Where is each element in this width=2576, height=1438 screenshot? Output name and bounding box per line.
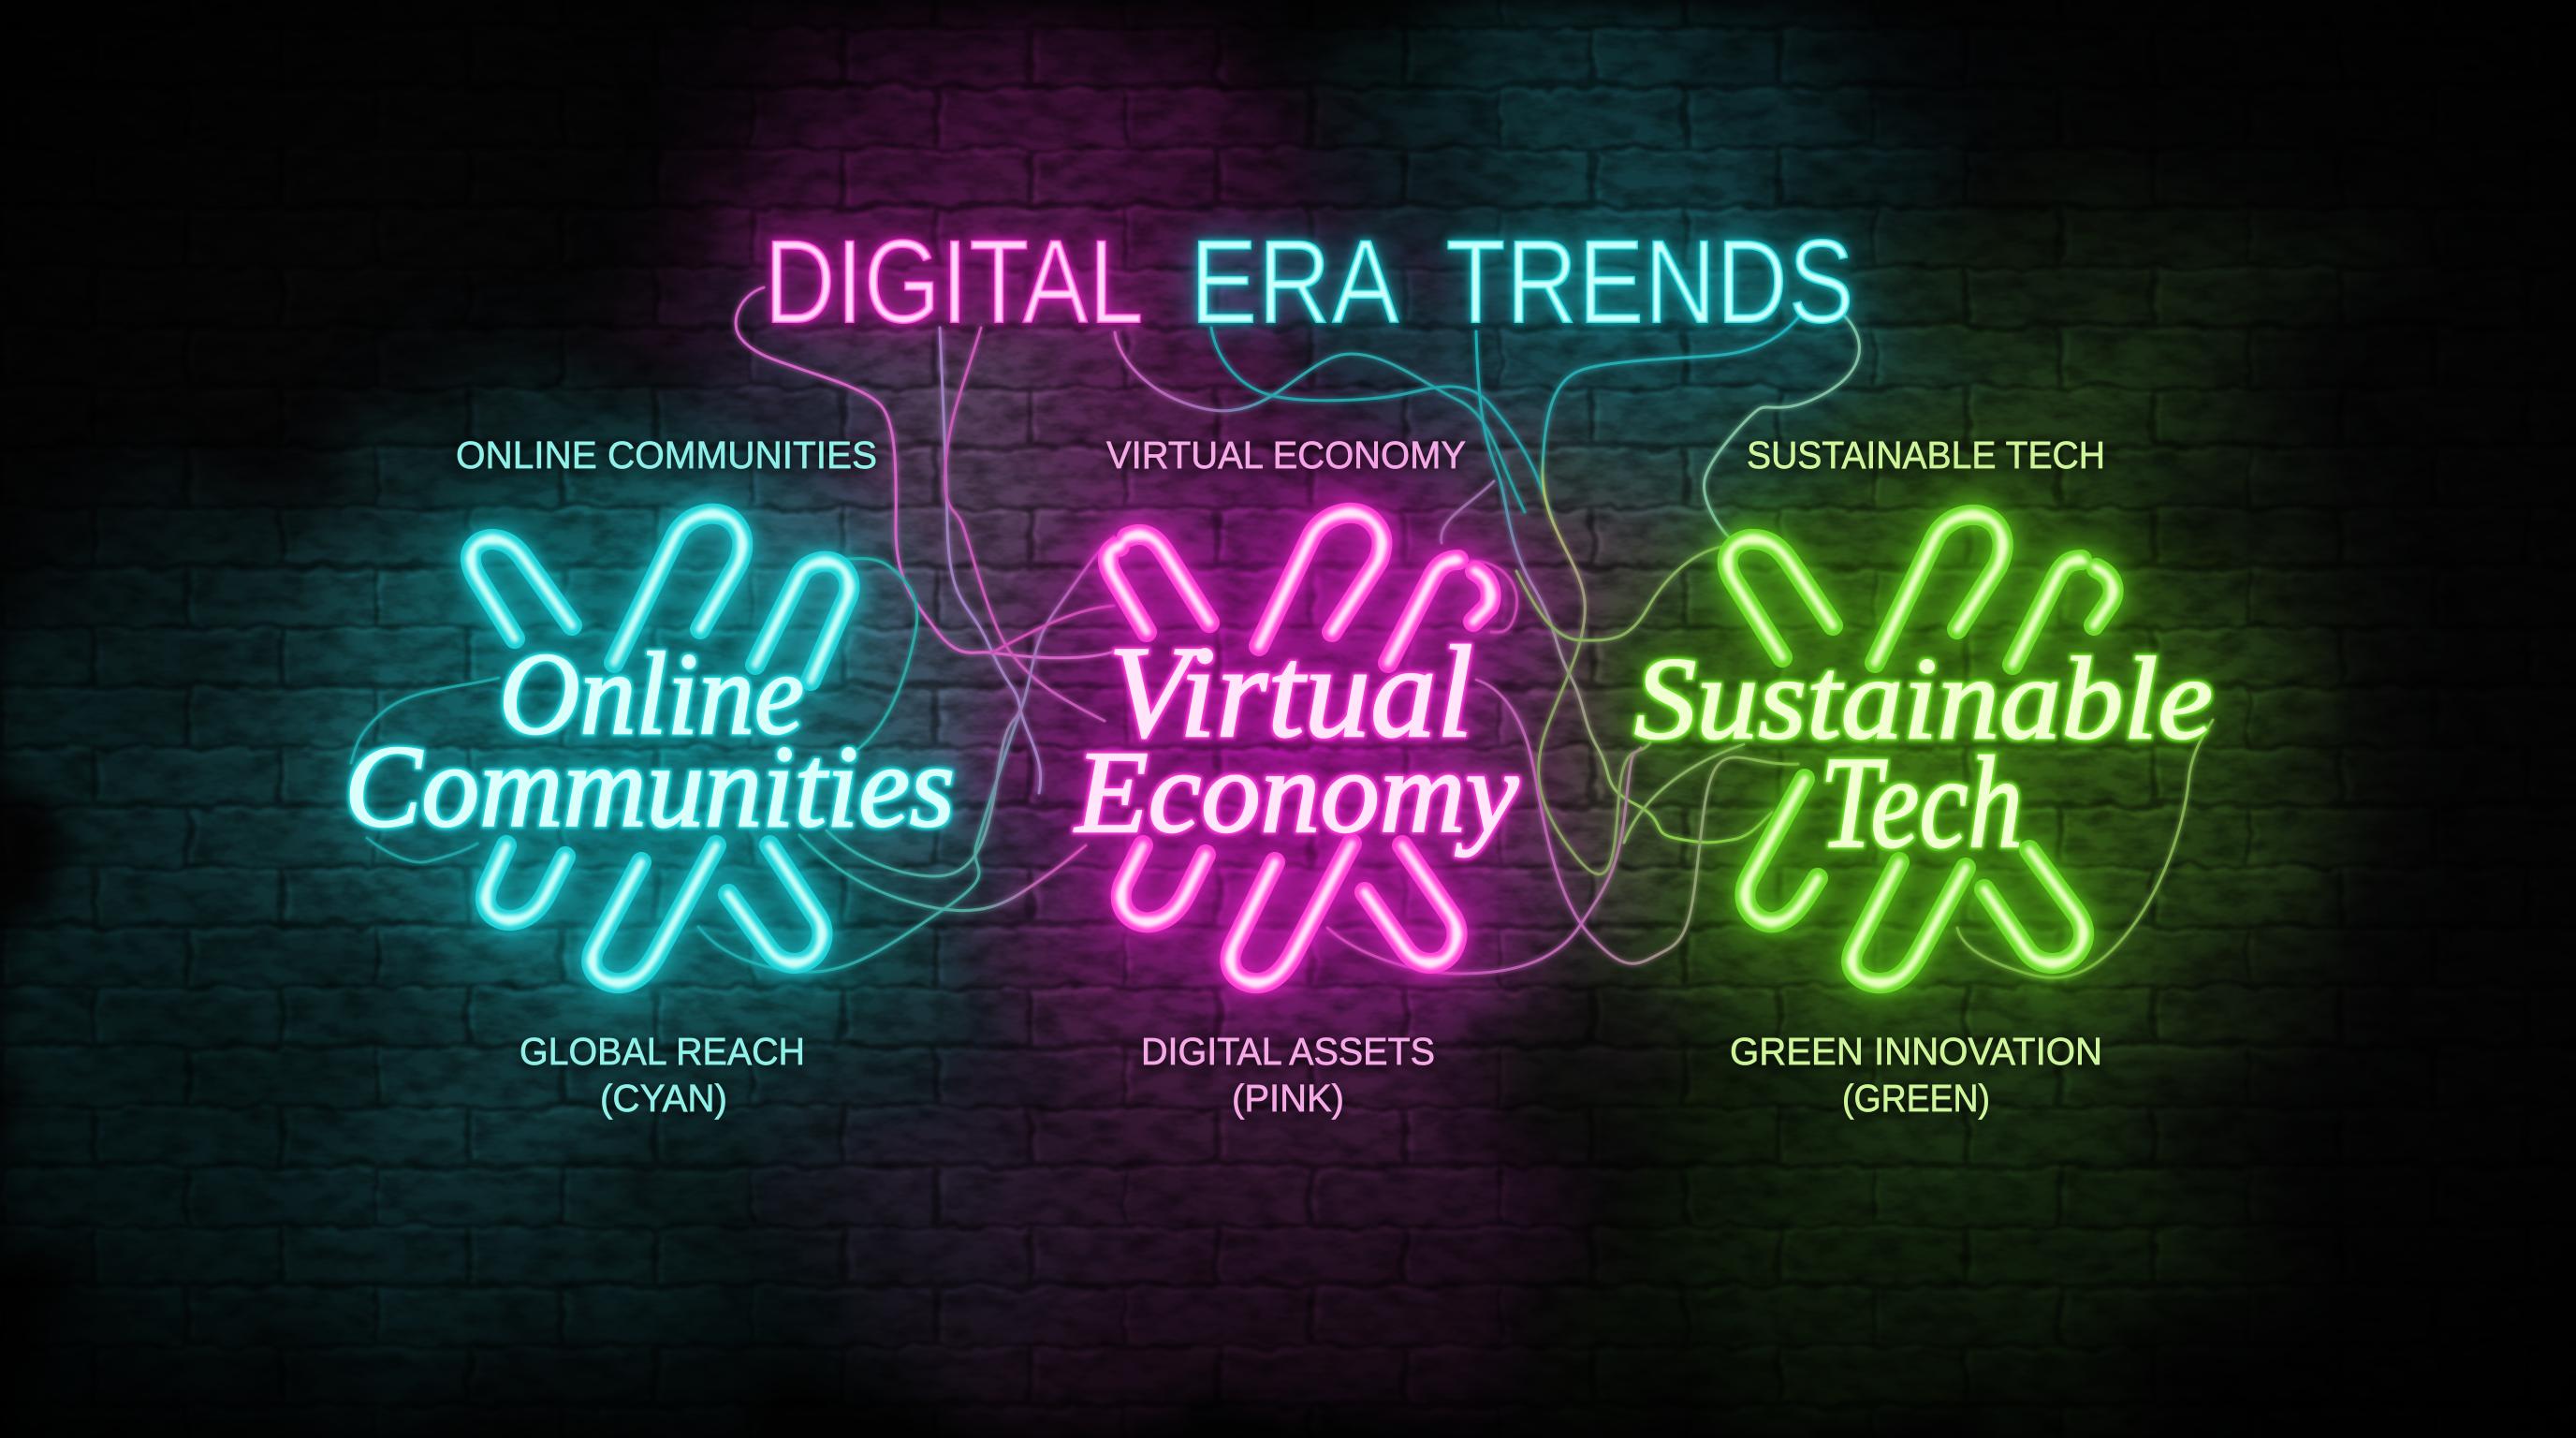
wire: virtual tube link (992, 606, 1114, 653)
wire: title S left (1539, 315, 1800, 874)
halo: green sign (1549, 393, 2298, 1105)
neon script heading (1074, 620, 1519, 858)
neon burst tubes (471, 514, 850, 983)
title (764, 215, 1854, 349)
wire: virtual bottom loop (1327, 748, 1641, 974)
neon script heading (1634, 635, 2213, 875)
bottom label (1730, 1030, 2102, 1120)
neon script heading: Tech (1820, 730, 2023, 875)
panel: online communities (344, 433, 955, 1120)
bottom label: GREEN INNOVATION (1730, 1030, 2102, 1073)
title word: era: ERA (1190, 215, 1400, 349)
wire: title T through to green (1476, 331, 1772, 843)
bottom label (520, 1030, 805, 1120)
wire: pink top right (1442, 481, 1494, 543)
top label: SUSTAINABLE TECH (1747, 433, 2105, 477)
neon script heading: Virtual (1108, 620, 1473, 765)
panel: sustainable tech (1634, 433, 2213, 1120)
wire: title L to center (1115, 332, 1525, 512)
wire: title I down (945, 328, 1105, 721)
wire: green tube left (1516, 546, 1727, 640)
halo: cyan sign (285, 403, 1016, 1095)
wire: title G down (940, 328, 1041, 793)
wire: green right loop (1957, 720, 2213, 977)
neon script heading: Communities (344, 723, 955, 852)
wire: cyan lower left (367, 838, 477, 862)
neon script heading: Economy (1074, 728, 1519, 858)
wire: virtual y to green tube (1476, 680, 1798, 963)
wire: title D to Virtual (736, 287, 1117, 658)
title word: trends: TRENDS (1445, 215, 1854, 349)
top label: ONLINE COMMUNITIES (456, 433, 877, 477)
neon script heading (344, 630, 955, 852)
bottom label: (GREEN) (1842, 1077, 1990, 1120)
wire: green lower left (1624, 744, 1744, 843)
wire: title S right (1705, 314, 1859, 541)
wire: cyan right loop (819, 559, 917, 749)
top label: VIRTUAL ECONOMY (1106, 433, 1466, 477)
neon script heading: Sustainable (1634, 635, 2213, 764)
wire: pink small loop (1470, 561, 1517, 632)
bottom label: (PINK) (1232, 1077, 1344, 1120)
neon script heading: Online (499, 630, 804, 759)
neon burst tubes (1728, 515, 2114, 983)
wire: communities loop two (799, 835, 1086, 911)
bottom label: GLOBAL REACH (520, 1030, 805, 1073)
wire: title E to center (1211, 328, 1554, 524)
bottom label: DIGITAL ASSETS (1141, 1030, 1435, 1073)
title word: digital: DIGITAL (764, 215, 1144, 349)
wiring between title and signs (351, 287, 2213, 977)
panel: virtual economy (1074, 433, 1519, 1120)
wire: communities loop one (827, 709, 1020, 876)
halo: pink sign (950, 403, 1643, 1095)
wire: cyan left loop (351, 678, 499, 763)
bottom label (1141, 1030, 1435, 1120)
bottom label: (CYAN) (600, 1077, 727, 1120)
wire: communities to virtual (698, 536, 1114, 972)
neon burst tubes (1108, 513, 1491, 983)
